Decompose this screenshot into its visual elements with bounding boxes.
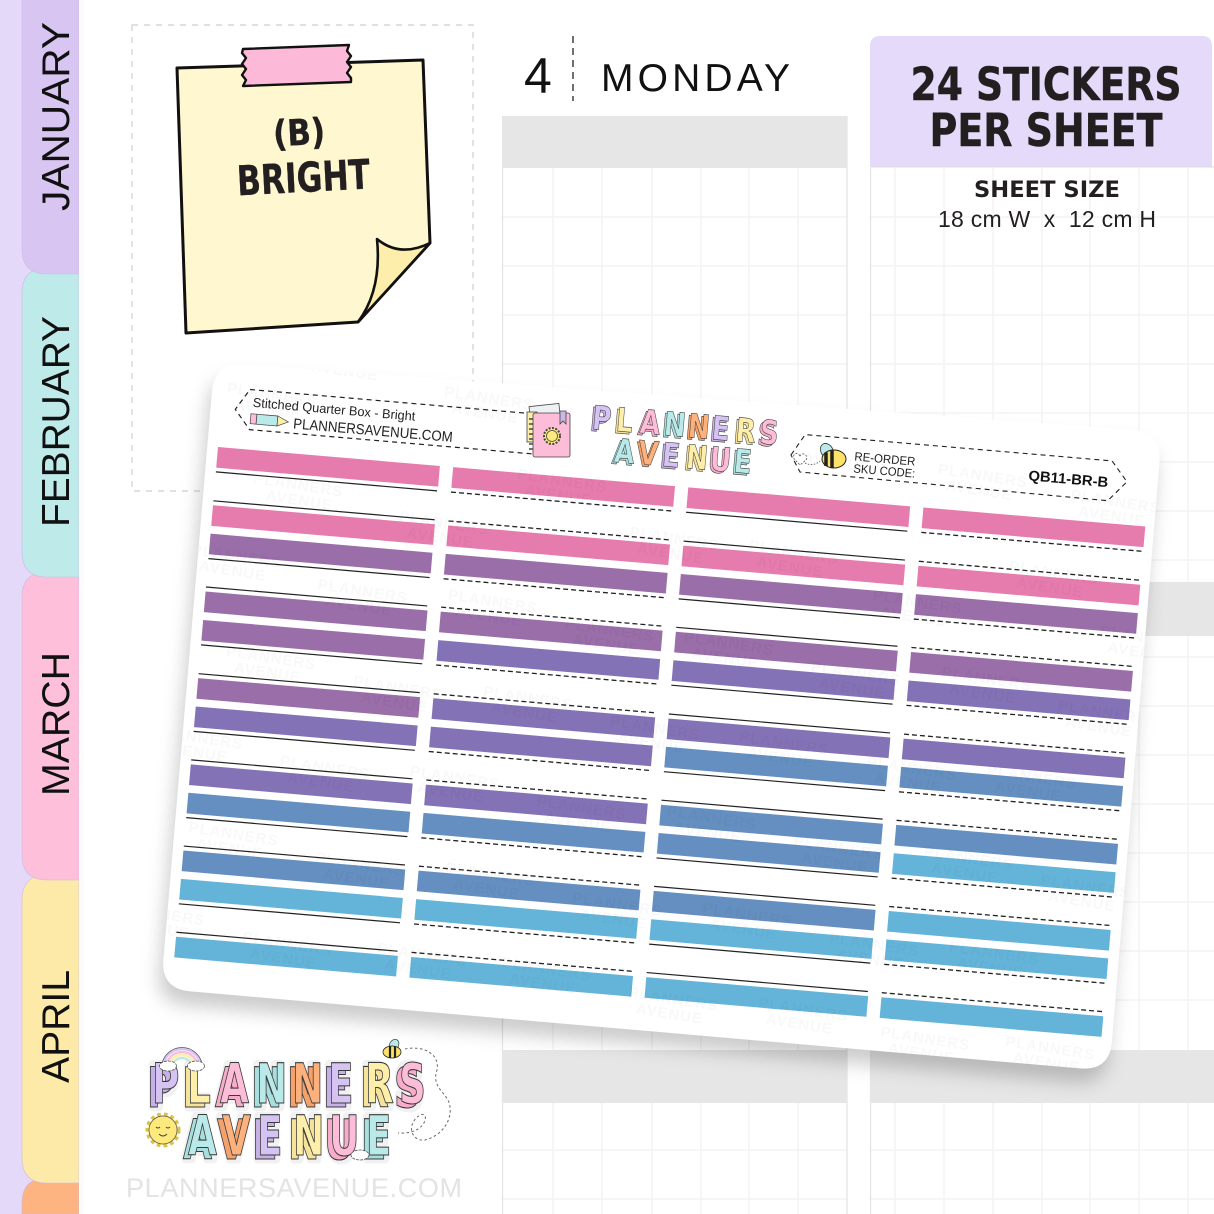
watermark pattern: AVENUE [765,1011,834,1038]
watermark pattern: PLANNERS [1040,872,1132,902]
logo halo: L [184,1056,208,1120]
logo extrusion: N [287,1057,318,1121]
watermark pattern: AVENUE [122,915,191,942]
sheet logo: N [662,405,688,446]
watermark pattern: AVENUE [690,645,760,672]
sticker column 1 [174,447,440,976]
logo halo: N [289,1056,320,1120]
watermark pattern: PLANNERS [872,587,964,618]
icon: notebook [527,403,570,457]
watermark pattern: AVENUE [1047,888,1116,915]
logo halo: E [325,1056,351,1120]
watermark pattern: AVENUE [195,836,264,863]
sheet size text [938,178,1156,232]
watermark pattern: PLANNERS [571,889,663,920]
sticky note: bright [177,45,430,333]
brand logo [147,1038,450,1173]
watermark pattern: AVENUE [249,945,318,972]
note corner fold [358,239,430,322]
sheet title tag [234,388,535,454]
panel: stickers per sheet: PER SHEET [930,104,1163,157]
watermark pattern: AVENUE [508,971,577,998]
note label: (B) [272,112,326,155]
sheet logo: V [637,434,660,474]
sheet logo: N [686,407,712,448]
watermark pattern: AVENUE [636,540,705,567]
sheet logo [586,399,780,486]
watermark pattern: AVENUE [384,956,453,983]
logo letter faces: A [220,1053,249,1117]
watermark pattern: PLANNERS [398,508,490,539]
watermark pattern: AVENUE [324,593,393,620]
sheet logo: U [708,440,733,481]
watermark pattern: PLANNERS [443,383,535,414]
watermark pattern: AVENUE [709,916,778,943]
reorder tag: RE-ORDER [854,449,916,469]
watermark pattern: PLANNERS [986,762,1078,793]
watermark pattern: PLANNERS [225,643,317,674]
panel: stickers per sheet [870,36,1214,167]
logo extrusion: L [182,1057,206,1121]
watermark pattern: PLANNERS [701,900,793,930]
watermark pattern: AVENUE [310,358,380,385]
planner column 1 [502,116,847,1214]
sheet logo: N [682,440,708,480]
watermark pattern: AVENUE [887,1040,956,1067]
logo letter faces: L [187,1053,211,1117]
tab: next month [22,1178,79,1214]
sticker strips [174,447,1145,1037]
watermark pattern: AVENUE [617,729,686,757]
side band behind tabs [0,0,79,1214]
tab: January: JANUARY [35,22,78,211]
watermark pattern: AVENUE [1012,1049,1081,1077]
date heading: MONDAY [601,57,790,100]
watermark pattern: AVENUE [543,809,613,836]
watermark pattern: AVENUE [944,477,1014,504]
watermark pattern: PLANNERS [941,664,1033,695]
sheet logo: S [758,413,780,454]
sheet logo: E [658,438,680,478]
watermark pattern: PLANNERS [482,683,574,714]
logo halo: U [326,1108,356,1172]
logo halo: R [362,1056,391,1120]
logo extrusion: E [361,1109,386,1173]
watermark pattern: AVENUE [930,860,999,887]
note label: BRIGHT [236,150,371,205]
watermark pattern: PLANNERS [447,586,539,617]
date heading [524,36,790,104]
reorder tag: SKU CODE: [853,461,916,481]
watermark pattern: PLANNERS [1008,558,1100,589]
icon: pencil [250,414,289,427]
planner column 2 [870,168,1214,1214]
logo letter faces: A [188,1105,217,1169]
sticker column 4 [880,507,1145,1037]
sheet logo: A [613,432,636,472]
sheet logo: A [636,405,660,445]
watermark pattern: AVENUE [956,955,1025,982]
watermark pattern: AVENUE [817,675,887,702]
logo letter faces: N [292,1053,323,1117]
logo halo: V [219,1108,248,1172]
watermark pattern: AVENUE [800,849,869,877]
sheet logo: R [734,411,758,452]
reorder tag: QB11-BR-B [1028,468,1109,491]
logo extrusion: N [251,1057,282,1121]
dashed sticker frame [132,25,473,491]
watermark pattern: AVENUE [579,906,648,933]
logo letter faces: N [256,1053,287,1117]
watermark pattern: PLANNERS [190,541,283,572]
logo extrusion: S [394,1057,421,1121]
tab: February: FEBRUARY [35,316,78,527]
watermark pattern: AVENUE [755,554,825,581]
watermark pattern: AVENUE [1015,574,1085,602]
sheet header [232,352,1132,519]
logo halo: P [149,1056,176,1120]
tab: April [22,875,79,1183]
watermark pattern: PLANNERS [352,673,444,704]
sheet logo: E [732,442,753,482]
watermark pattern: AVENUE [360,689,429,716]
logo letter faces: E [257,1105,283,1169]
sheet shadow [159,378,1156,1083]
watermark pattern: PLANNERS [948,938,1040,969]
watermark pattern: AVENUE [524,482,593,509]
watermark pattern: AVENUE [948,680,1017,707]
sheet logo: U [706,442,731,482]
watermark pattern: AVENUE [233,396,303,423]
watermark pattern: AVENUE [452,876,521,903]
logo letter faces [152,1053,426,1169]
logo letter faces: E [366,1105,391,1169]
watermark pattern: AVENUE [233,659,302,686]
watermark pattern: AVENUE [265,487,334,514]
watermark pattern: PLANNERS [866,753,958,784]
sheet logo: E [708,411,729,451]
logo halo: N [290,1108,321,1172]
sheet logo: N [684,438,710,479]
watermark pattern: AVENUE [1077,503,1146,530]
sticker sheet [163,370,1160,1069]
watermark pattern: PLANNERS [738,728,830,759]
sheet logo: L [614,401,635,441]
watermark pattern: PLANNERS [152,723,244,753]
watermark pattern: AVENUE [160,739,229,766]
watermark pattern: AVENUE [286,769,356,796]
watermark pattern: PLANNERS [241,929,333,960]
logo extrusion: N [288,1109,319,1173]
sheet logo: N [684,409,709,450]
logo letter faces: V [222,1105,251,1169]
watermark pattern: PLANNERS [317,576,409,607]
watermark pattern: AVENUE [635,1001,704,1028]
tab: February [22,268,79,577]
watermark pattern: AVENUE [836,946,905,973]
watermark pattern: AVENUE [673,819,743,847]
watermark pattern: AVENUE [454,603,523,630]
date heading: 4 [524,48,552,104]
logo halo: A [185,1108,214,1172]
watermark pattern: PLANNERS [923,843,1015,874]
tab: April: APRIL [35,970,78,1083]
sheet logo: N [660,407,685,447]
website footer: PLANNERSAVENUE.COM [126,1173,462,1203]
watermark pattern: AVENUE [416,779,486,806]
watermark pattern: PLANNERS [666,803,758,834]
sheet logo: E [660,436,682,476]
sheet logo: A [610,434,634,474]
watermark pattern: PLANNERS [609,713,701,744]
washi tape [242,45,351,86]
logo halo: E [254,1108,280,1172]
watermark pattern: PLANNERS [627,984,719,1015]
watermark pattern: PLANNERS [252,470,344,501]
logo extrusion: R [360,1057,389,1121]
watermark pattern: PLANNERS [314,849,406,880]
logo extrusion: V [217,1109,246,1173]
logo extrusion: P [147,1057,174,1121]
logo letter faces: N [293,1105,324,1169]
watermark pattern: AVENUE [322,866,391,893]
tab: January [22,0,79,274]
logo halo: A [217,1056,246,1120]
tab: March: MARCH [35,652,78,796]
watermark pattern: AVENUE [879,604,948,631]
watermark pattern: PLANNERS [376,940,468,971]
watermark pattern: PLANNERS [516,466,608,497]
logo letter faces: S [399,1053,426,1117]
sticker column 3 [645,487,910,1017]
watermark pattern: AVENUE [490,699,559,727]
watermark pattern: PLANNERS [500,954,592,985]
tab: March [22,572,79,880]
watermark pattern: AVENUE [802,450,871,477]
page-coordinate icons on the sheet [527,403,846,468]
icon: cloud [351,1150,369,1160]
logo extrusion: E [323,1057,349,1121]
sheet logo: R [732,413,755,453]
logo letter faces: E [328,1053,354,1117]
logo halo: S [396,1056,423,1120]
watermark pattern: PLANNERS [748,537,840,568]
sticker column 2 [409,467,675,997]
icon: sun [148,1115,178,1145]
note label [234,109,371,205]
watermark pattern: PLANNERS [683,629,775,659]
watermark pattern: PLANNERS [114,899,206,930]
logo halo: E [363,1108,388,1172]
sheet size text: 18 cm W x 12 cm H [938,206,1156,232]
logo extrusion: U [324,1109,354,1173]
watermark pattern: AVENUE [198,558,267,585]
watermark pattern: PLANNERS [757,994,849,1025]
sheet logo: S [756,415,778,455]
sheet title tag: Stitched Quarter Box - Bright [252,395,416,424]
logo extrusion: A [183,1109,212,1173]
watermark pattern: AVENUE [406,524,475,552]
watermark pattern: PLANNERS [1004,1033,1096,1064]
icon: bee [794,441,846,468]
watermark pattern: PLANNERS [810,659,902,689]
watermark pattern: PLANNERS [793,833,885,864]
watermark pattern: AVENUE [873,770,943,797]
sheet logo: E [730,444,751,484]
icon: bee with dotted trail [383,1038,450,1140]
watermark pattern: PLANNERS [937,461,1029,492]
watermark pattern: PLANNERS [409,763,501,794]
watermark pattern: PLANNERS [1057,697,1149,728]
watermark pattern: PLANNERS [536,793,628,824]
watermark pattern: AVENUE [993,778,1063,806]
watermark pattern: PLANNERS [187,819,280,850]
logo extrusion: E [252,1109,278,1173]
sheet logo: A [638,403,662,443]
watermark pattern: PLANNERS [828,930,920,960]
watermark pattern: AVENUE [1106,639,1176,666]
watermark pattern: PLANNERS [879,1024,971,1054]
sheet logo: L [612,403,632,443]
watermark pattern: PLANNERS [279,753,371,783]
logo halo: N [253,1056,284,1120]
watermark pattern: AVENUE [1064,714,1134,741]
logo extrusion: A [215,1057,244,1121]
sheet logo: E [710,409,731,449]
logo halo [149,1056,423,1172]
sheet size text: SHEET SIZE [974,178,1120,203]
watermark pattern: PLANNERS [1099,623,1191,654]
logo extrusion [147,1057,421,1173]
watermark pattern: PLANNERS [444,859,536,890]
sheet logo: P [591,399,613,439]
watermark pattern: PLANNERS [564,615,656,646]
sheet title tag: PLANNERSAVENUE.COM [293,416,453,446]
icon: rainbow [160,1048,204,1071]
watermark pattern: AVENUE [451,400,520,427]
logo letter faces: R [365,1053,394,1117]
logo letter faces: P [152,1053,179,1117]
watermark pattern: PLANNERS [226,380,318,411]
watermark pattern [110,341,1213,1098]
reorder tag [789,434,1129,502]
watermark pattern: AVENUE [571,631,640,658]
watermark pattern: PLANNERS [628,524,721,555]
sheet logo: V [634,436,658,476]
watermark pattern: PLANNERS [1070,487,1162,517]
sheet logo: P [588,401,611,441]
watermark pattern: AVENUE [746,745,815,772]
logo letter faces: U [329,1105,359,1169]
